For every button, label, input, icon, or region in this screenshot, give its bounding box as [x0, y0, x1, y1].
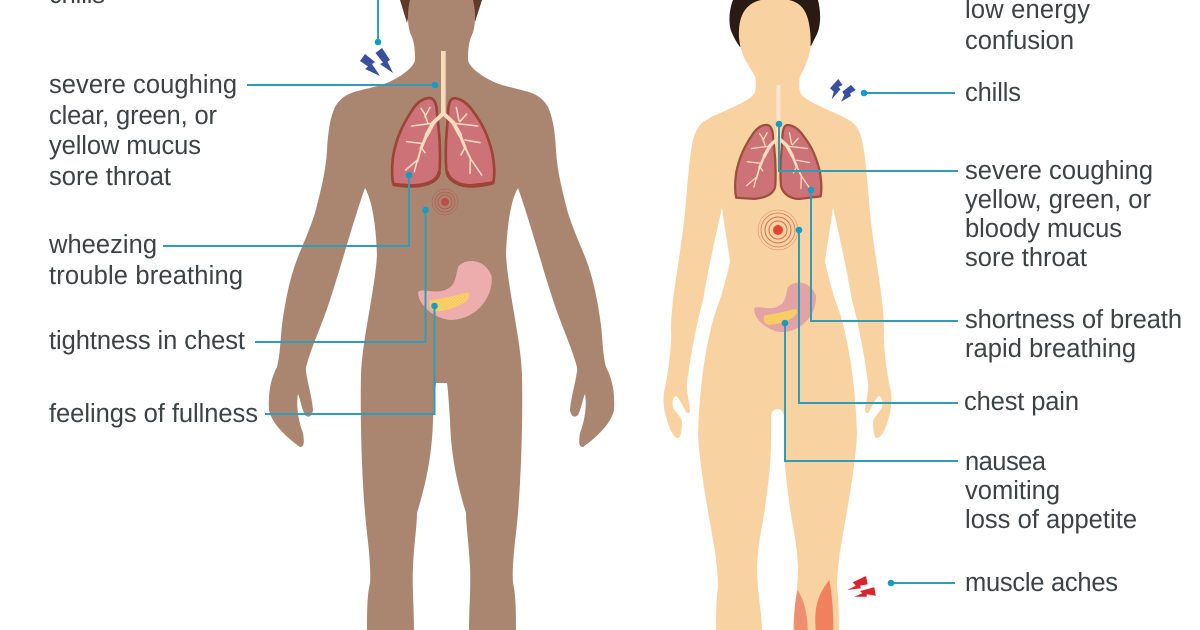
female lungs and trachea — [735, 85, 821, 199]
male chills bolts — [360, 48, 393, 76]
right symptom labels: shortness of breath — [965, 306, 1182, 334]
right symptom labels: sore throat — [965, 244, 1087, 272]
right symptom labels: yellow, green, or — [965, 186, 1152, 214]
right symptom labels: nausea — [965, 448, 1047, 476]
left symptom labels: clear, green, or — [49, 102, 218, 130]
right symptom labels — [964, 0, 1182, 597]
male leader lines — [163, 0, 438, 414]
left symptom labels: yellow mucus — [49, 132, 201, 160]
right symptom labels: chills — [965, 79, 1021, 107]
female head — [739, 0, 811, 77]
male hair — [400, 0, 482, 23]
right symptom labels: chest pain — [964, 388, 1079, 416]
female body silhouette — [664, 75, 891, 630]
male lungs and trachea — [392, 51, 494, 186]
left symptom labels: feelings of fullness — [49, 400, 258, 428]
female leader lines — [776, 90, 958, 586]
muscle ache bolts — [847, 576, 876, 597]
left symptom labels: tightness in chest — [49, 327, 245, 355]
left symptom labels: sore throat — [49, 163, 171, 191]
right symptom labels: loss of appetite — [965, 506, 1137, 534]
right symptom labels: bloody mucus — [965, 215, 1122, 243]
male chest pain target — [432, 189, 458, 215]
female chest pain target — [758, 210, 798, 250]
female hair — [729, 0, 820, 47]
male stomach and pancreas — [418, 261, 492, 320]
female figure — [664, 0, 891, 630]
right symptom labels: severe coughing — [965, 157, 1153, 185]
left symptom labels: wheezing — [48, 231, 157, 259]
right symptom labels: vomiting — [965, 477, 1060, 505]
left symptom labels — [48, 0, 258, 428]
left symptom labels: severe coughing — [49, 71, 237, 99]
female chills bolts — [830, 79, 856, 102]
left symptom labels: trouble breathing — [49, 262, 243, 290]
female stomach and pancreas — [754, 283, 816, 332]
female leg muscles — [794, 580, 833, 630]
right symptom labels: muscle aches — [965, 569, 1118, 597]
male figure — [269, 0, 614, 630]
male body silhouette — [269, 0, 614, 630]
right symptom labels: rapid breathing — [965, 335, 1136, 363]
right symptom labels: confusion — [965, 27, 1074, 55]
